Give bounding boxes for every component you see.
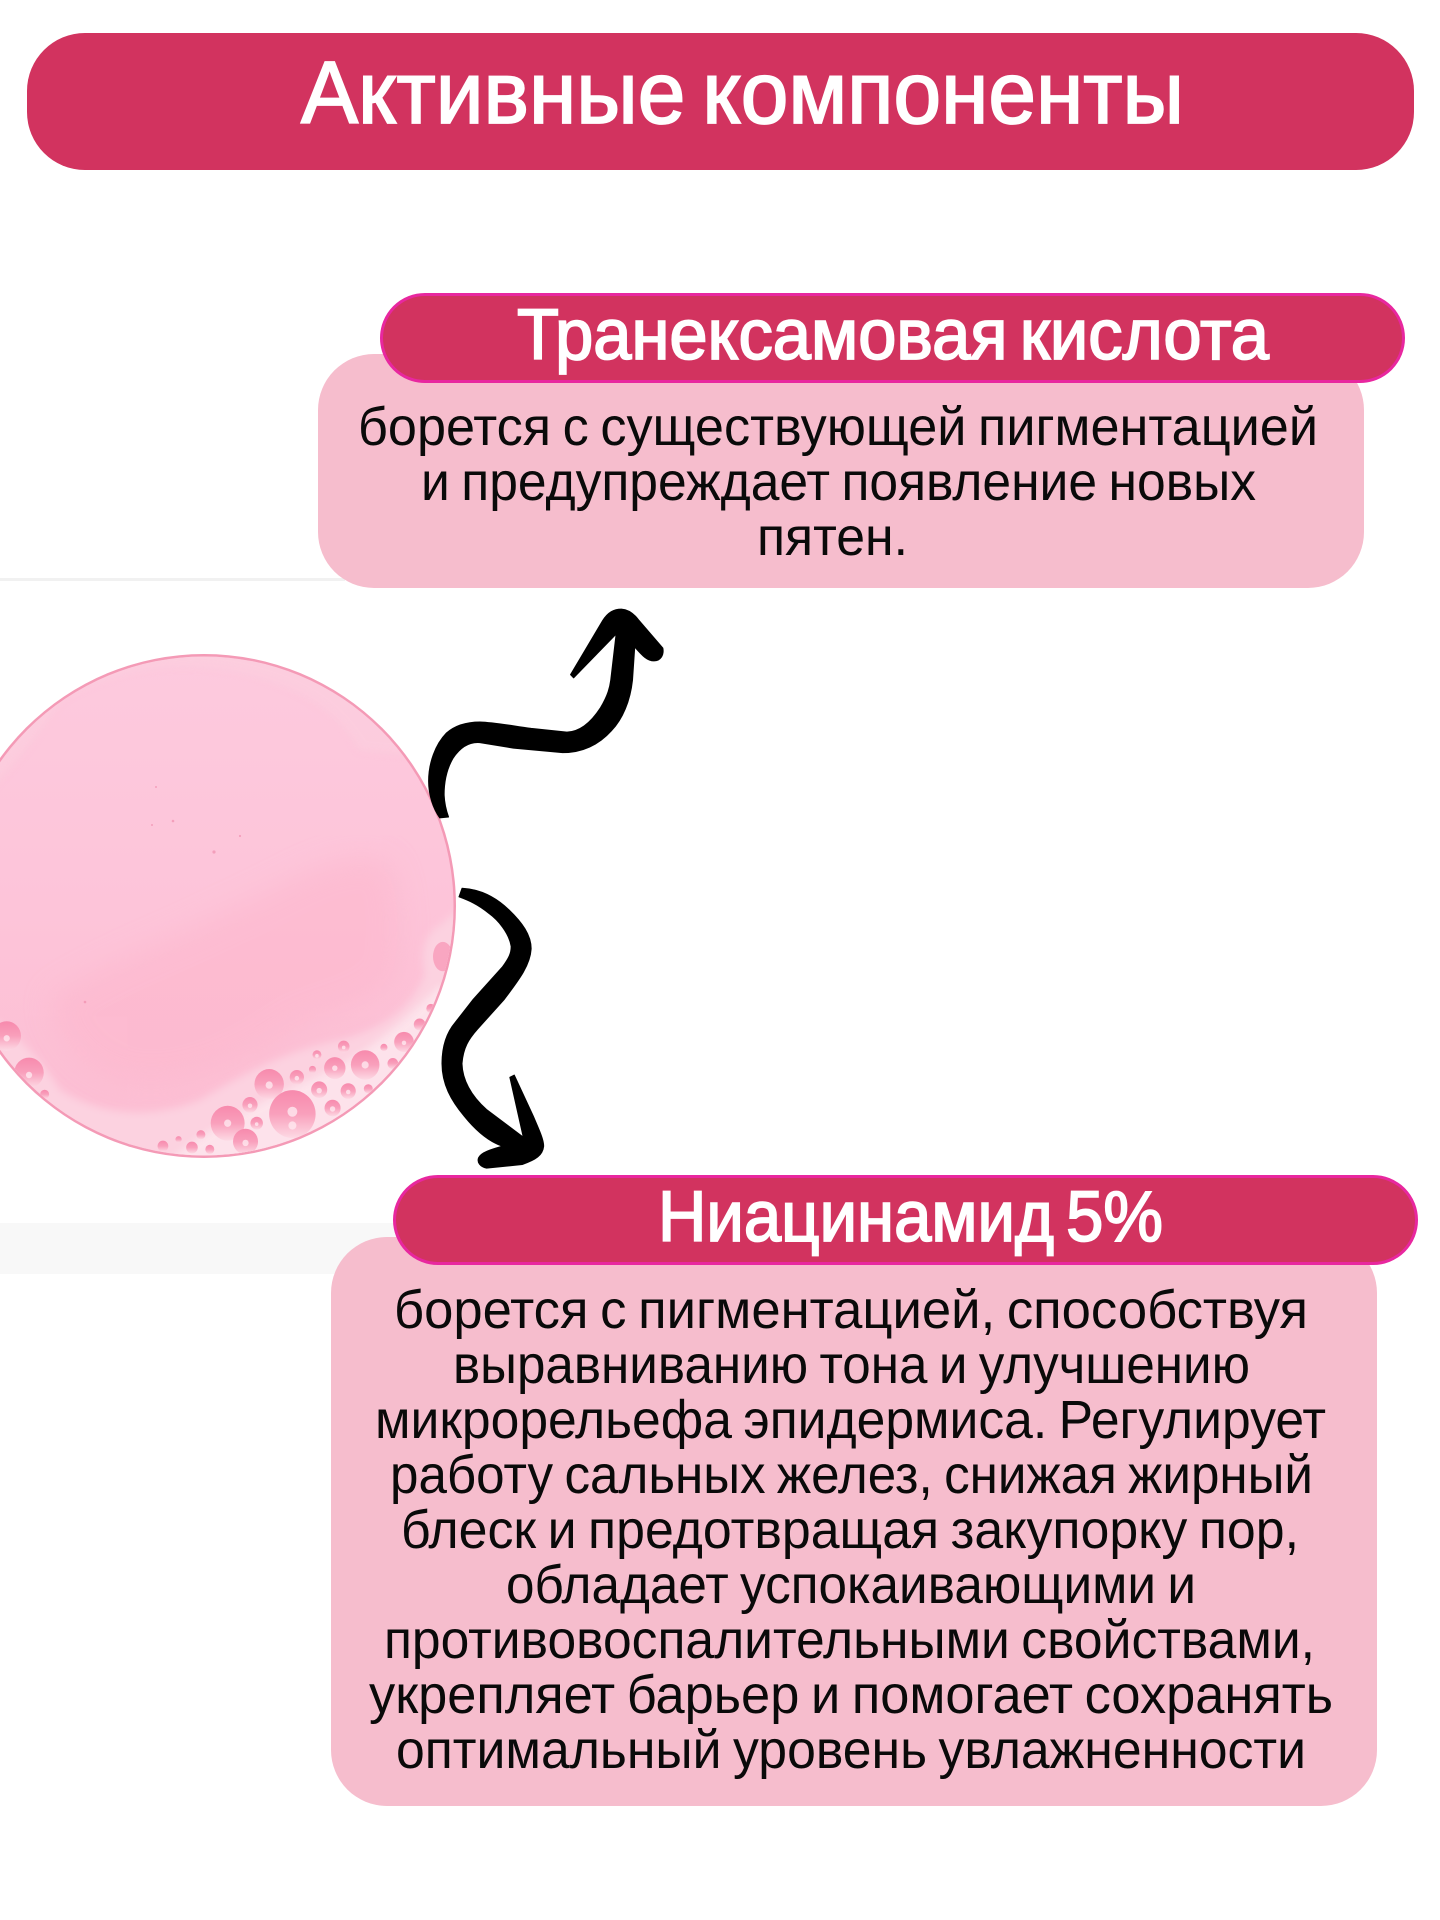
description text: пятен. <box>757 507 908 567</box>
description text: борется с пигментацией, способствуя <box>394 1280 1308 1340</box>
panel: niacinamide <box>331 1176 1416 1806</box>
pale foam at rim <box>177 988 440 1156</box>
description text: обладает успокаивающими и <box>506 1555 1196 1615</box>
pale upper rim wash <box>4 657 394 758</box>
panel body <box>331 1237 1377 1806</box>
darker lower pool <box>292 884 374 910</box>
description text: и предупреждает появление новых <box>421 452 1256 512</box>
description text: борется с существующей пигментацией <box>358 397 1318 457</box>
bubbles <box>254 1069 284 1099</box>
heading pill <box>382 294 1404 382</box>
description text: выравниванию тона и улучшению <box>453 1335 1250 1395</box>
arrow: circle to tranexamic acid <box>429 609 663 818</box>
arrow: circle to niacinamide <box>442 888 544 1168</box>
heading pill: Транексамовая кислота <box>517 296 1269 375</box>
title text: Активные компоненты <box>301 43 1184 142</box>
faint background band <box>0 1223 400 1274</box>
description text <box>358 397 1318 567</box>
description text <box>369 1280 1333 1780</box>
bubble highlights <box>4 1035 406 1146</box>
description text: блеск и предотвращая закупорку пор, <box>401 1500 1299 1560</box>
faint background line <box>0 578 345 581</box>
title banner <box>27 33 1414 170</box>
description text: микрорельефа эпидермиса. Регулирует <box>375 1390 1326 1450</box>
serum circle image <box>0 640 470 1180</box>
foam band <box>0 914 454 1156</box>
panel: tranexamic acid <box>318 294 1404 588</box>
description text: работу сальных желез, снижая жирный <box>390 1445 1313 1505</box>
heading pill <box>394 1176 1416 1264</box>
heading pill: Ниацинамид 5% <box>658 1178 1163 1257</box>
description text: противовоспалительными свойствами, <box>384 1610 1315 1670</box>
specks <box>84 786 241 1003</box>
description text: оптимальный уровень увлажненности <box>396 1720 1306 1780</box>
panel body <box>318 354 1364 588</box>
description text: укрепляет барьер и помогает сохранять <box>369 1665 1333 1725</box>
